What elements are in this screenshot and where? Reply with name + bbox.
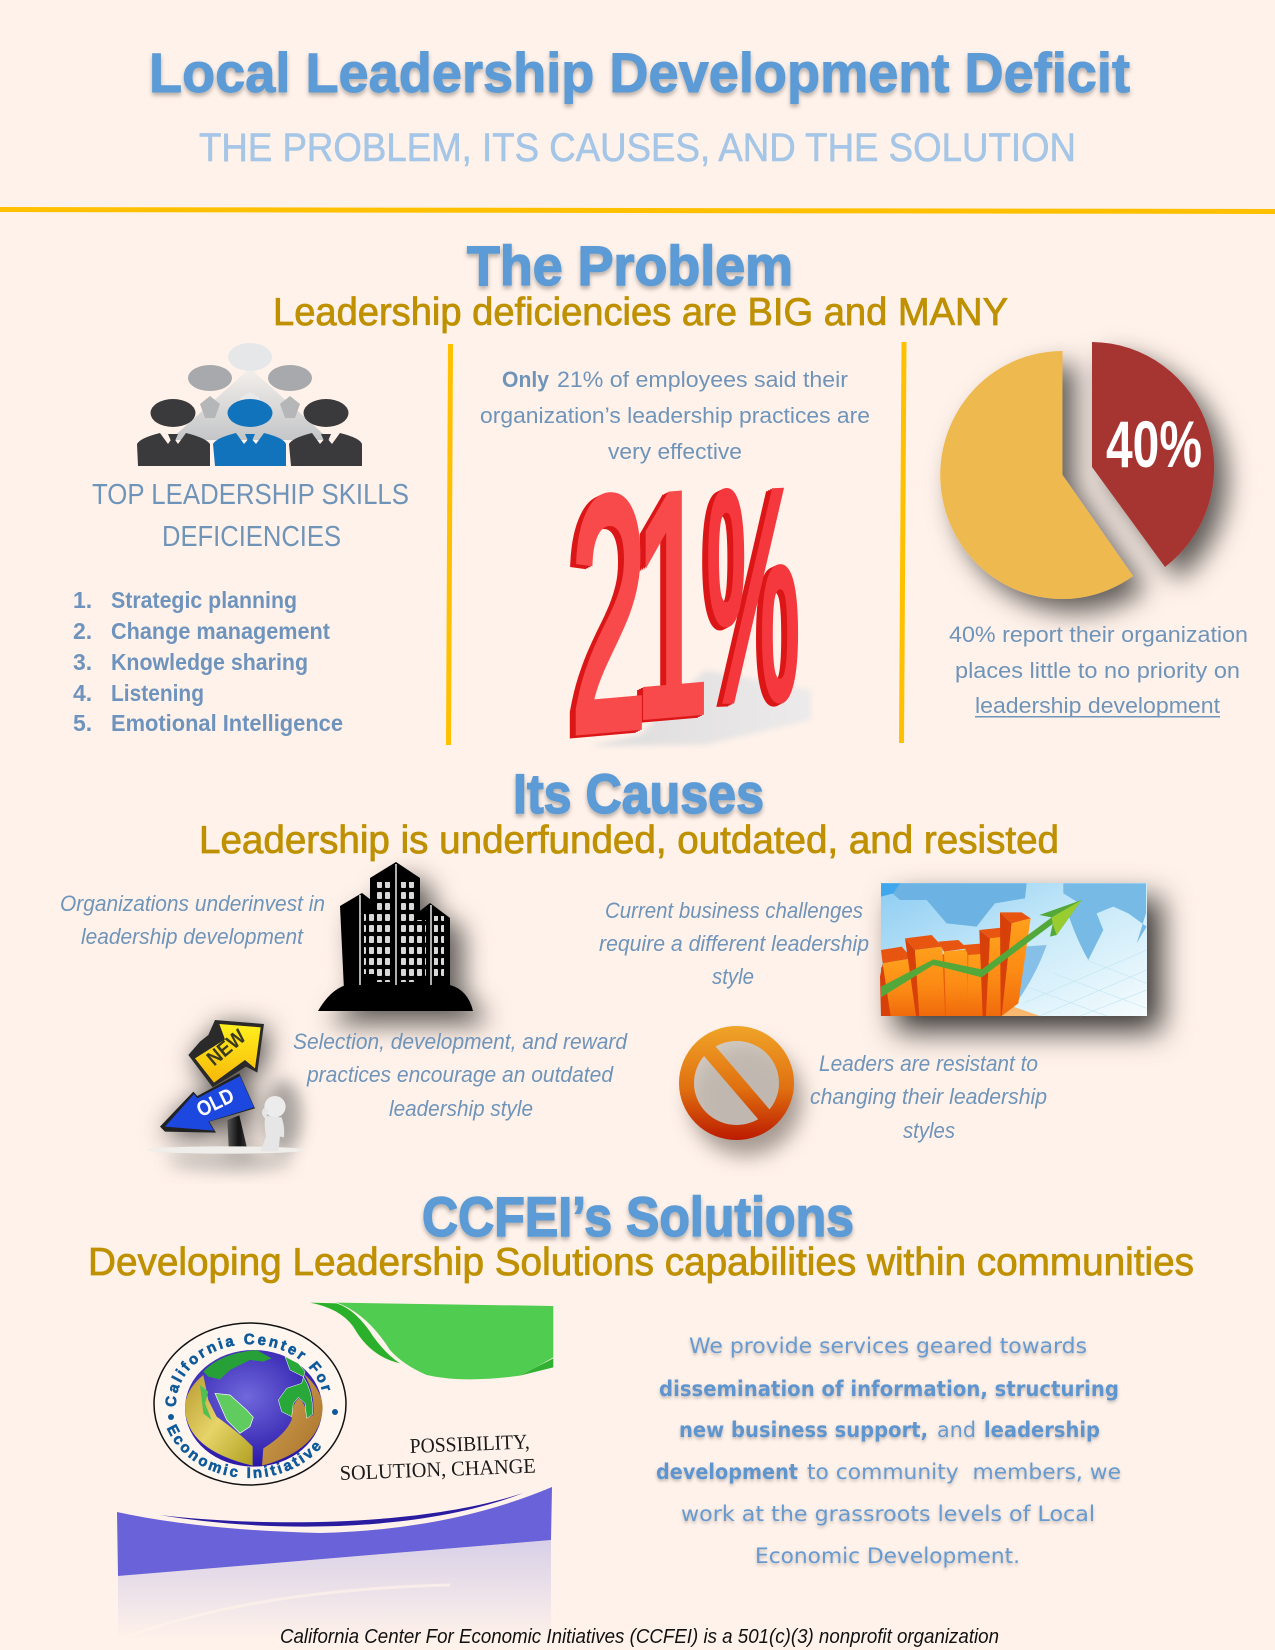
heading: Its Causes: Its Causes [513, 762, 764, 825]
list: top deficiencies: Listening [111, 680, 204, 706]
icon: city buildings [318, 862, 473, 1011]
graphic: 21 percent: % [706, 429, 800, 764]
text: 40 percent statement: 40% report their organization [949, 622, 1248, 647]
image: growth chart over world map [880, 883, 1147, 1016]
heading: CCFEI's Solutions: CCFEI’s Solutions [422, 1185, 854, 1248]
text: tagline: POSSIBILITY, [409, 1429, 530, 1458]
subheading: solutions: Developing Leadership Solutions capabilities within communities [88, 1241, 1194, 1284]
list: top deficiencies: Knowledge sharing [111, 649, 308, 675]
text: resistant leaders: Leaders are resistant to [819, 1051, 1038, 1076]
text: services paragraph: dissemination of information, structuring [659, 1377, 1119, 1401]
text: 40 percent statement: leadership development [975, 693, 1220, 718]
chart: 40 percent pie [940, 342, 1214, 599]
graphic: 21 percent: 2 [571, 425, 647, 802]
text: outdated style: leadership style [389, 1096, 533, 1121]
icon: old and new signpost: OLD [193, 1083, 238, 1122]
heading: top leadership skills deficiencies [92, 479, 409, 553]
chart: 40 percent pie: 40% [1106, 407, 1202, 481]
icon: prohibition sign [686, 1034, 802, 1156]
text: resistant leaders: changing their leadership [810, 1084, 1047, 1109]
list: top deficiencies [73, 587, 343, 736]
brochure: CCFEI card [117, 1302, 554, 1620]
text: resistant leaders [810, 1051, 1047, 1143]
graphic: 21 percent [571, 425, 811, 802]
text: 21 percent statement: Only [502, 367, 550, 392]
text: outdated style [293, 1029, 628, 1121]
list: top deficiencies: Change management [111, 618, 330, 644]
graphic: 21 percent: 1 [635, 425, 708, 784]
text: 21 percent statement: 21% of employees said their [557, 367, 848, 392]
text: 21 percent statement: organization’s leadership practices are [480, 403, 870, 428]
text: 21 percent statement: very effective [608, 439, 742, 464]
text: 40 percent statement [949, 622, 1248, 718]
icon: leadership people [137, 343, 362, 466]
text: services paragraph: new business support, [679, 1418, 928, 1442]
text: outdated style: practices encourage an outdated [306, 1062, 614, 1087]
text: tagline: SOLUTION, CHANGE [339, 1453, 536, 1485]
text: services paragraph: work at the grassroots levels of Local [681, 1502, 1095, 1526]
text: business challenges [599, 898, 869, 989]
logo: California Center for Economic Initiative: Economic Initiative [166, 1424, 321, 1478]
text: services paragraph: Economic Development. [755, 1544, 1020, 1568]
text: services paragraph: We provide services geared towards [689, 1334, 1087, 1358]
subheading: causes: Leadership is underfunded, outdated, and resisted [199, 819, 1059, 862]
footer note: California Center For Economic Initiatives (CCFEI) is a 501(c)(3) nonprofit organization [280, 1626, 999, 1648]
list: top deficiencies: 5. [73, 710, 92, 736]
text: 40 percent statement: places little to no priority on [955, 658, 1240, 683]
text: business challenges: Current business challenges [605, 898, 863, 923]
list: top deficiencies: 4. [73, 680, 92, 706]
heading: The Problem: The Problem [467, 234, 793, 297]
heading: top leadership skills deficiencies: TOP LEADERSHIP SKILLS [92, 479, 409, 511]
text: business challenges: style [712, 964, 754, 989]
text: tagline [339, 1429, 536, 1485]
icon: old and new signpost: NEW [202, 1025, 251, 1070]
text: outdated style: Selection, development, and reward [293, 1029, 628, 1054]
heading: top leadership skills deficiencies: DEFICIENCIES [162, 521, 341, 553]
list: top deficiencies: Strategic planning [111, 587, 297, 613]
text: business challenges: require a different leadership [599, 931, 869, 956]
text: underinvest: leadership development [81, 924, 304, 949]
list: top deficiencies: 3. [73, 649, 92, 675]
list: top deficiencies: 2. [73, 618, 92, 644]
icon: old and new signpost [147, 1020, 307, 1172]
text: services paragraph [656, 1334, 1121, 1568]
shape: green wave [310, 1303, 553, 1379]
list: top deficiencies: Emotional Intelligence [111, 710, 343, 736]
text: services paragraph: and [937, 1418, 976, 1442]
subtitle: THE PROBLEM, ITS CAUSES, AND THE SOLUTION [199, 126, 1076, 170]
text: underinvest: Organizations underinvest in [60, 891, 325, 916]
text: services paragraph: development [656, 1460, 798, 1484]
logo: California Center for Economic Initiative [153, 1322, 347, 1486]
title: Local Leadership Development Deficit [149, 41, 1130, 104]
text: underinvest [60, 891, 325, 949]
text: services paragraph: to community members, we [807, 1460, 1121, 1484]
text: 21 percent statement [480, 367, 870, 464]
text: resistant leaders: styles [903, 1118, 955, 1143]
logo: California Center for Economic Initiative: California Center For [165, 1333, 330, 1406]
subheading: problem: Leadership deficiencies are BIG and MANY [273, 291, 1008, 334]
text: services paragraph: leadership [984, 1418, 1100, 1442]
shape: purple wave [117, 1487, 552, 1640]
list: top deficiencies: 1. [73, 587, 92, 613]
